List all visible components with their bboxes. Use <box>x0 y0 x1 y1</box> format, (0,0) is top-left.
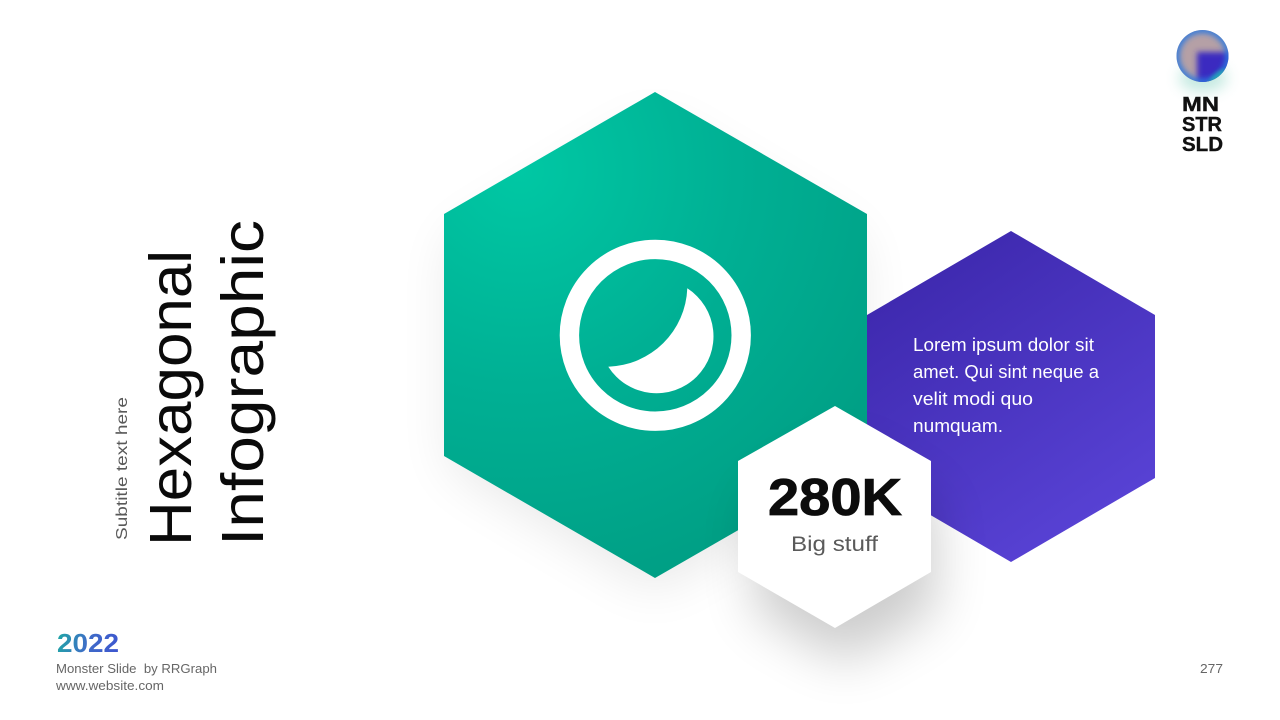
body text: amet. Qui sint neque a <box>913 362 1100 382</box>
page number: 277 <box>1200 661 1223 676</box>
title <box>138 220 276 546</box>
logo text <box>1182 94 1223 156</box>
stat value: 280K <box>768 469 902 527</box>
hexagon: purple panel <box>867 231 1155 562</box>
icon: ring with crescent moon <box>569 249 741 421</box>
footer credits: Monster Slide by RRGraph <box>56 661 217 676</box>
logo text: STR <box>1182 114 1223 136</box>
stat label: Big stuff <box>791 533 878 556</box>
logo text: MN <box>1182 94 1219 116</box>
hexagon: white stat panel <box>738 406 931 628</box>
subtitle: Subtitle text here <box>114 397 131 540</box>
title: Infographic <box>210 220 276 546</box>
hexagon shadow: green <box>450 122 860 590</box>
body text: velit modi quo <box>913 389 1033 409</box>
year: 2022 <box>57 628 119 658</box>
logo text: SLD <box>1182 134 1223 156</box>
logo orb <box>1174 30 1232 98</box>
footer credits <box>55 661 217 693</box>
body text <box>913 335 1100 436</box>
body text: numquam. <box>913 416 1003 436</box>
hexagon shadow: white <box>755 450 935 662</box>
body text: Lorem ipsum dolor sit <box>913 335 1094 355</box>
hexagon: green panel <box>444 92 867 578</box>
footer credits: www.website.com <box>55 678 164 693</box>
title: Hexagonal <box>138 250 204 546</box>
